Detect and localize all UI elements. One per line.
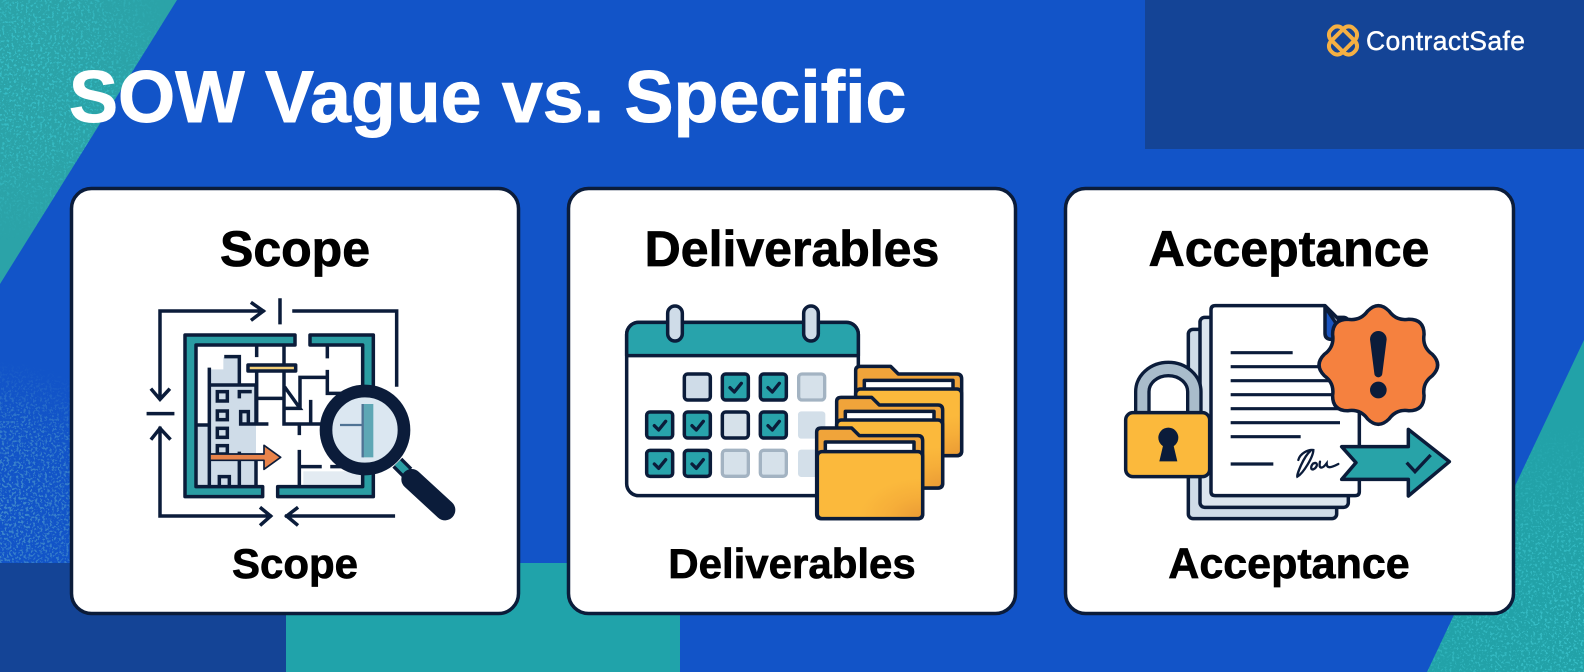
stacked pages [1188, 329, 1337, 519]
heading: Acceptance: Acceptance [1149, 221, 1429, 277]
yellow bar [248, 365, 296, 371]
folder: front [817, 428, 923, 519]
teal arrow [1342, 429, 1449, 496]
magnifier [397, 463, 407, 473]
outer arrows [148, 300, 397, 524]
folder: back [856, 366, 962, 456]
calendar [627, 322, 858, 496]
logo: ContractSafe [1326, 24, 1525, 57]
warning badge [1319, 306, 1438, 424]
document text lines [1231, 353, 1340, 464]
icon: floor plan with magnifier [148, 300, 445, 524]
logo wordmark: ContractSafe [1366, 26, 1525, 56]
heading: Deliverables: Deliverables [645, 221, 939, 277]
icon: document with lock, badge and arrow [1126, 306, 1449, 519]
signature [1297, 450, 1338, 477]
icon: logo mark [1326, 24, 1360, 57]
icon: calendar with folders [627, 306, 962, 519]
panel: Acceptance [1066, 188, 1514, 614]
panel: Scope [72, 188, 518, 614]
orange arrow [210, 445, 281, 469]
title: SOW Vague vs. Specific [69, 55, 906, 138]
padlock [1126, 369, 1210, 477]
floor plan walls [257, 346, 347, 485]
main document [1211, 306, 1359, 496]
label: Acceptance: Acceptance [1168, 540, 1410, 588]
label: Scope: Scope [232, 540, 358, 587]
calendar rings [668, 306, 682, 341]
heading: Scope: Scope [220, 221, 370, 277]
label: Deliverables: Deliverables [668, 540, 916, 587]
folder: middle [837, 397, 943, 488]
building [209, 357, 256, 485]
panel: Deliverables [568, 188, 1016, 614]
checkbox grid [647, 374, 825, 477]
